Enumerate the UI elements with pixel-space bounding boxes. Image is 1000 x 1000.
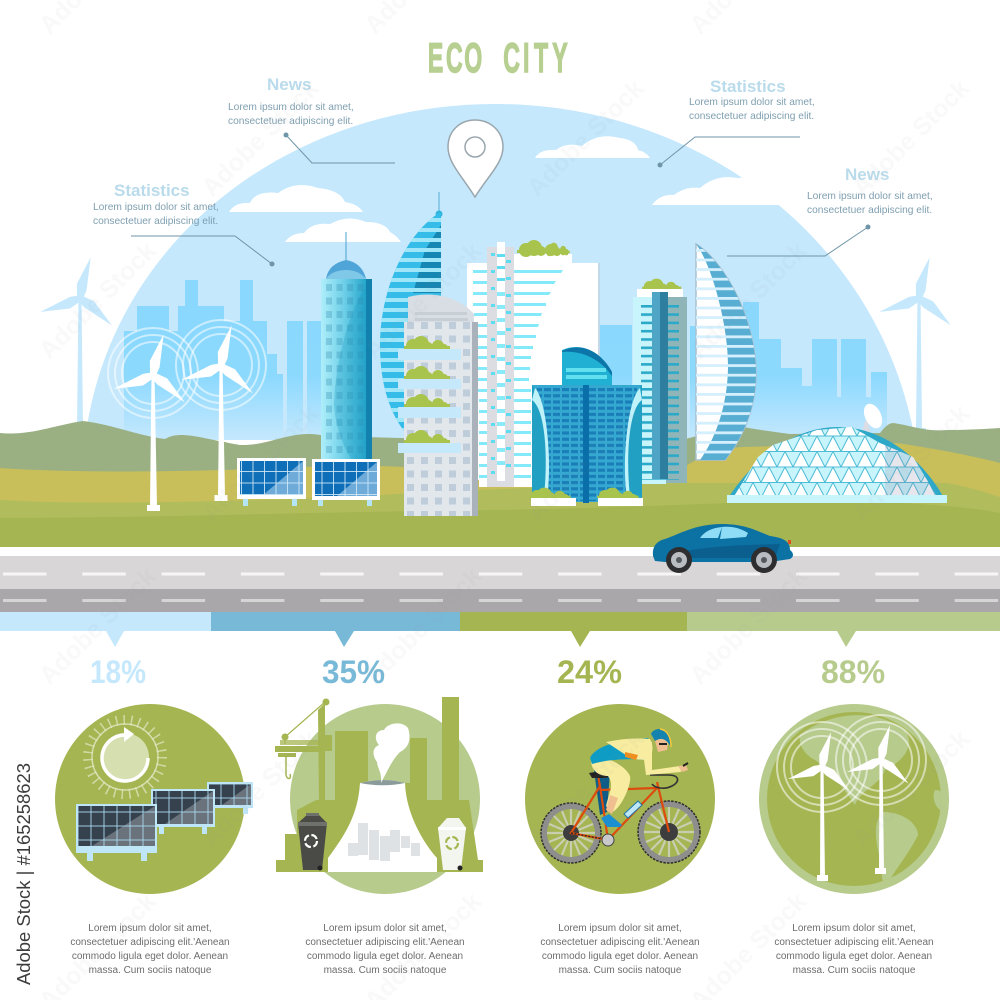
factory silhouette bbox=[276, 697, 483, 872]
sky dome bbox=[85, 104, 915, 440]
text block 2: consectetuer adipiscing elit.'Aenean bbox=[305, 937, 465, 948]
callout: statistics left: consectetuer adipiscing elit. bbox=[93, 216, 218, 227]
callout: news left bbox=[228, 75, 395, 163]
icon: map pin bbox=[448, 120, 503, 197]
bike frame bbox=[571, 774, 669, 840]
callout: statistics left: Statistics bbox=[114, 181, 190, 200]
arm bbox=[642, 742, 681, 775]
callout: news left: News bbox=[267, 75, 311, 94]
icon: blue car bbox=[653, 524, 793, 573]
grey tower with green balconies bbox=[398, 294, 478, 516]
front wind turbine 1 bbox=[108, 328, 198, 511]
callout: statistics right: Statistics bbox=[710, 77, 786, 96]
callout: statistics left bbox=[93, 181, 274, 266]
icon: power plant and recycling circle bbox=[275, 697, 483, 894]
callout: news right: News bbox=[845, 165, 889, 184]
icon: back wind turbine right bbox=[878, 256, 955, 434]
percentage 35%: 35% bbox=[322, 654, 385, 690]
crescent tower bbox=[696, 244, 758, 460]
glass dome bbox=[727, 401, 947, 503]
percentage 88%: 88% bbox=[821, 654, 885, 690]
bottle bbox=[624, 801, 642, 818]
distant skyline bbox=[124, 280, 887, 440]
sail tower bbox=[380, 192, 442, 431]
callout: news left: Lorem ipsum dolor sit amet, bbox=[228, 102, 354, 113]
road bbox=[0, 547, 1000, 612]
text block 4: massa. Cum sociis natoque bbox=[793, 965, 916, 976]
light recycling bin bbox=[438, 818, 466, 870]
text block 3: massa. Cum sociis natoque bbox=[559, 965, 682, 976]
hills bbox=[0, 421, 1000, 548]
callout: news right bbox=[727, 165, 933, 256]
icon: back wind turbine left bbox=[39, 256, 116, 432]
icon: solar energy circle bbox=[55, 704, 253, 894]
dark recycling bin bbox=[298, 813, 327, 870]
white tower bbox=[467, 240, 600, 487]
text block 1: commodo ligula eget dolor. Aenean bbox=[72, 951, 228, 962]
icon: cyclist circle bbox=[525, 704, 715, 894]
text block 3: Lorem ipsum dolor sit amet, bbox=[558, 923, 682, 934]
blue office building bbox=[529, 347, 643, 506]
text block 4: Lorem ipsum dolor sit amet, bbox=[792, 923, 916, 934]
panel: city scene bbox=[0, 104, 1000, 548]
solar panel 2 bbox=[312, 459, 380, 506]
text block 1: massa. Cum sociis natoque bbox=[89, 965, 212, 976]
callout: statistics right: Lorem ipsum dolor sit amet, bbox=[689, 97, 815, 108]
text block 4: commodo ligula eget dolor. Aenean bbox=[776, 951, 932, 962]
back leg bbox=[594, 770, 610, 815]
text block 2: massa. Cum sociis natoque bbox=[324, 965, 447, 976]
color tabs with pointers bbox=[0, 612, 1000, 647]
saddle bbox=[589, 772, 610, 778]
percentage 24%: 24% bbox=[557, 654, 622, 690]
rider thigh and shin bbox=[591, 757, 630, 812]
text block 3: commodo ligula eget dolor. Aenean bbox=[542, 951, 698, 962]
text block 1 bbox=[70, 923, 230, 976]
wheels bbox=[541, 801, 700, 863]
clouds bbox=[229, 136, 790, 242]
text block 2: Lorem ipsum dolor sit amet, bbox=[323, 923, 447, 934]
percentage 18%: 18% bbox=[90, 654, 146, 690]
front wind turbine 2 bbox=[176, 320, 266, 501]
text block 1: Lorem ipsum dolor sit amet, bbox=[88, 923, 212, 934]
head bbox=[654, 737, 669, 752]
text block 4: consectetuer adipiscing elit.'Aenean bbox=[774, 937, 934, 948]
crane bbox=[275, 699, 332, 800]
callout: news left: consectetuer adipiscing elit. bbox=[228, 116, 353, 127]
text block 3: consectetuer adipiscing elit.'Aenean bbox=[540, 937, 700, 948]
text block 3 bbox=[540, 923, 700, 976]
title: ECO CITY bbox=[428, 35, 568, 82]
cooling tower bbox=[328, 780, 437, 872]
callout: news right: consectetuer adipiscing elit. bbox=[807, 205, 932, 216]
text block 4 bbox=[774, 923, 934, 976]
text block 2: commodo ligula eget dolor. Aenean bbox=[307, 951, 463, 962]
handlebar bbox=[650, 775, 678, 788]
icon: globe with wind turbines circle bbox=[759, 704, 949, 900]
text block 2 bbox=[305, 923, 465, 976]
torso bbox=[590, 738, 650, 764]
glass tower bbox=[321, 232, 372, 460]
callout: statistics right bbox=[658, 77, 815, 168]
solar panel 1 bbox=[237, 458, 306, 506]
callout: statistics left: Lorem ipsum dolor sit amet, bbox=[93, 202, 219, 213]
callout: news right: Lorem ipsum dolor sit amet, bbox=[807, 191, 933, 202]
callout: statistics right: consectetuer adipiscing elit. bbox=[689, 111, 814, 122]
right teal tower bbox=[633, 279, 687, 484]
text block 1: consectetuer adipiscing elit.'Aenean bbox=[70, 937, 230, 948]
stock id label: Adobe Stock | #165258623 bbox=[14, 763, 34, 985]
